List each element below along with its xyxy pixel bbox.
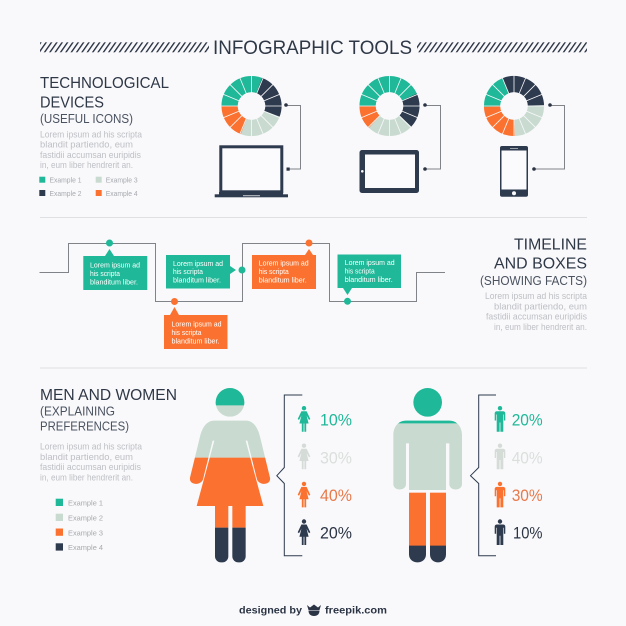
heading: (EXPLAINING (40, 404, 115, 418)
text block: fastidii accumsan euripidis (486, 312, 587, 323)
timeline box 3: his scripta (172, 328, 202, 337)
legend (39, 176, 138, 198)
timeline box 5: blanditum liber. (345, 275, 393, 284)
text block (485, 291, 588, 333)
timeline box 3: blanditum liber. (172, 336, 220, 345)
donut chart: tablet (358, 75, 420, 137)
bracket: man (470, 395, 496, 556)
bracket: woman (277, 395, 302, 556)
stat 30%: 30% (320, 448, 352, 467)
text block: blandit partiendo, eum (40, 140, 133, 151)
text block: Lorem ipsum ad his scripta (40, 442, 143, 452)
heading: DEVICES (40, 94, 104, 112)
heading (480, 236, 587, 288)
panel: timeline text (480, 236, 588, 333)
timeline box 2: his scripta (173, 267, 204, 276)
timeline box 4 (252, 240, 316, 289)
heading: MEN AND WOMEN (40, 387, 177, 404)
legend: Example 2 (68, 514, 103, 522)
icon: laptop (215, 147, 288, 197)
legend: Example 1 (68, 498, 103, 508)
connector: phone (532, 103, 564, 171)
timeline box 4: Lorem ipsum ad (259, 259, 309, 268)
divider (40, 216, 587, 218)
donut chart: phone (483, 75, 545, 137)
stat 20%: 20% (320, 523, 352, 542)
icon: woman grey (298, 444, 310, 469)
icon: woman navy (298, 519, 310, 545)
legend: Example 2 (50, 189, 82, 198)
connector: laptop (284, 103, 300, 171)
text block: blandit partiendo, eum (494, 301, 587, 312)
stat 30%: 30% (512, 486, 543, 505)
footer: credit (239, 604, 387, 616)
stat 40%: 40% (320, 486, 352, 505)
divider (40, 367, 587, 369)
connector: tablet (423, 103, 440, 171)
icon: phone (500, 146, 528, 197)
figure: woman (190, 388, 270, 562)
timeline box 5: his scripta (345, 267, 376, 276)
heading: PREFERENCES) (40, 419, 129, 434)
donut chart: laptop (220, 75, 282, 137)
timeline box 1: Lorem ipsum ad (90, 260, 140, 270)
right hatched band (417, 42, 587, 52)
heading (40, 75, 169, 126)
icon: man navy (495, 519, 505, 545)
text block: in, eum liber hendrerit an. (40, 160, 133, 171)
stats: man (495, 406, 543, 545)
stat 10%: 10% (513, 523, 542, 542)
timeline box 2: Lorem ipsum ad (173, 259, 223, 268)
icon: woman teal (298, 406, 310, 432)
heading: (SHOWING FACTS) (480, 273, 587, 288)
header (40, 38, 587, 59)
timeline box 2 (166, 255, 246, 288)
text block: fastidii accumsan euripidis (40, 462, 141, 473)
legend: Example 4 (106, 189, 138, 198)
text block: in, eum liber hendrerit an. (494, 322, 587, 333)
stat 10%: 10% (320, 410, 352, 429)
timeline box 3: Lorem ipsum ad (172, 320, 222, 328)
timeline box 5 (338, 254, 401, 305)
timeline box 4: blanditum liber. (259, 275, 307, 284)
icon: man orange (495, 482, 505, 507)
heading (40, 387, 177, 434)
timeline box 1: blanditum liber. (90, 278, 138, 286)
text block: Lorem ipsum ad his scripta (40, 129, 143, 140)
stat 40%: 40% (512, 448, 543, 467)
text block (40, 442, 143, 484)
text block (40, 129, 143, 171)
timeline line (40, 244, 445, 302)
icon: tablet (360, 150, 419, 193)
timeline box 4: his scripta (259, 267, 290, 276)
text block: Lorem ipsum ad his scripta (485, 291, 588, 302)
text block: blandit partiendo, eum (40, 452, 133, 463)
heading: TECHNOLOGICAL (40, 75, 169, 92)
text block: in, eum liber hendrerit an. (40, 472, 133, 484)
timeline box 2: blanditum liber. (173, 276, 221, 285)
text block: fastidii accumsan euripidis (40, 150, 141, 161)
footer: credit: freepik.com (325, 604, 387, 616)
figure: man (393, 388, 462, 562)
icon: crown (307, 604, 321, 616)
panel: technological devices text (39, 75, 169, 198)
stat 20%: 20% (512, 410, 543, 429)
title: INFOGRAPHIC TOOLS (213, 38, 412, 59)
footer: credit: designed by (239, 604, 302, 616)
left hatched band (40, 42, 209, 52)
timeline box 1: his scripta (90, 269, 121, 278)
icon: man grey (495, 444, 505, 469)
heading: (USEFUL ICONS) (40, 111, 133, 126)
stats: woman (298, 406, 352, 545)
timeline box 3 (164, 298, 228, 349)
legend: Example 3 (106, 176, 138, 184)
timeline box 1 (83, 240, 147, 290)
icon: man teal (495, 406, 505, 432)
panel: men and women text (40, 387, 177, 552)
icon: woman orange (298, 482, 310, 507)
legend (56, 498, 103, 552)
legend: Example 4 (68, 543, 103, 552)
legend: Example 3 (68, 528, 103, 537)
timeline box 5: Lorem ipsum ad (345, 258, 395, 267)
heading: TIMELINE (514, 236, 587, 254)
heading: AND BOXES (494, 256, 587, 272)
legend: Example 1 (50, 176, 82, 184)
